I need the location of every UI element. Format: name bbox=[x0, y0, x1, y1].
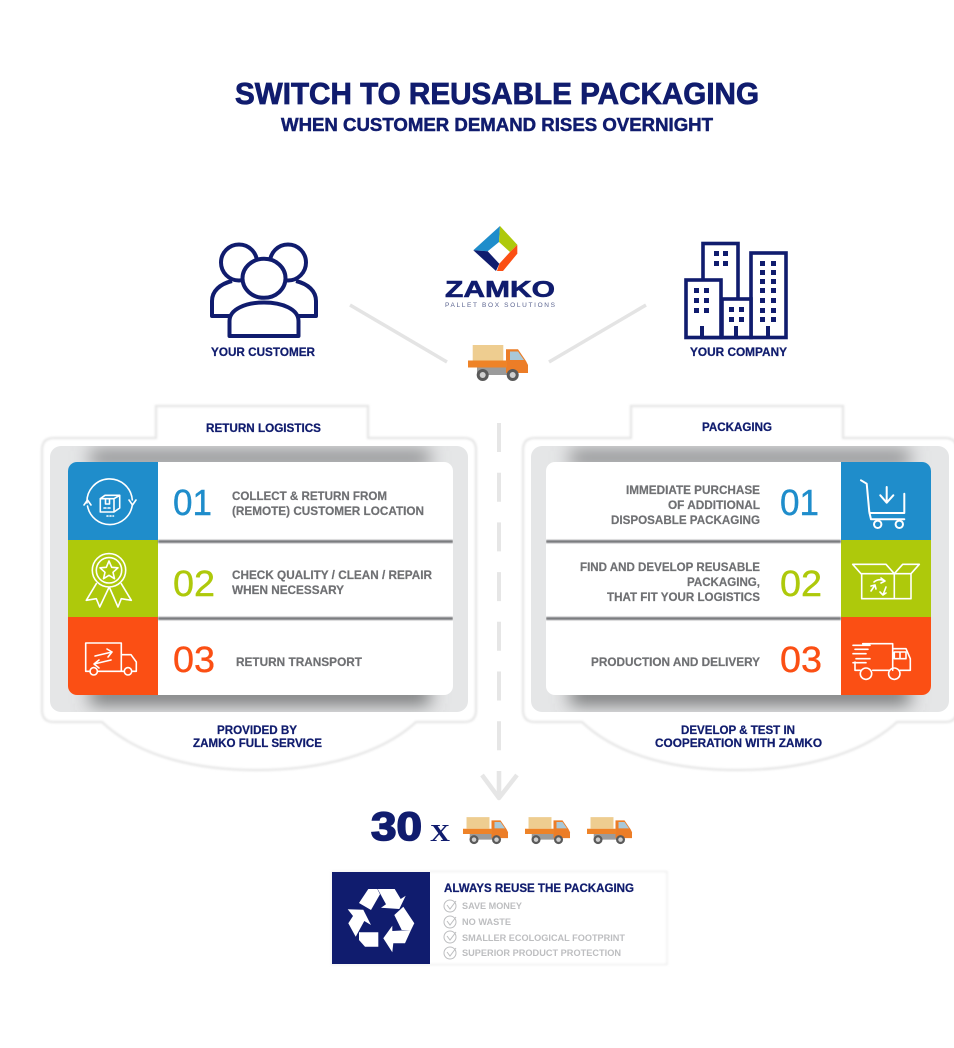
step 02: 02 bbox=[780, 563, 822, 604]
icon: your customer: YOUR CUSTOMER bbox=[211, 345, 315, 359]
step 01 bbox=[173, 482, 424, 523]
icon: your company bbox=[686, 244, 787, 359]
title: WHEN CUSTOMER DEMAND RISES OVERNIGHT bbox=[281, 115, 713, 135]
icon: cart bbox=[861, 480, 904, 528]
step 01: OF ADDITIONAL bbox=[668, 498, 760, 512]
step 03: 03 bbox=[780, 639, 822, 680]
caption: develop and test: COOPERATION WITH ZAMKO bbox=[655, 736, 822, 750]
caption: provided by: ZAMKO FULL SERVICE bbox=[193, 736, 322, 750]
panel: packaging bbox=[523, 406, 954, 770]
caption: develop and test bbox=[655, 723, 822, 750]
step 02: THAT FIT YOUR LOGISTICS bbox=[607, 590, 760, 604]
heading: packaging: PACKAGING bbox=[702, 420, 772, 434]
step 01: 01 bbox=[173, 482, 212, 523]
heading: return logistics: RETURN LOGISTICS bbox=[206, 421, 321, 435]
logo: Zamko: ZAMKO bbox=[445, 276, 555, 302]
benefits list: SUPERIOR PRODUCT PROTECTION bbox=[462, 948, 621, 958]
step 01: (REMOTE) CUSTOMER LOCATION bbox=[232, 504, 424, 518]
logo: Zamko: PALLET BOX SOLUTIONS bbox=[445, 302, 556, 309]
caption: develop and test: DEVELOP & TEST IN bbox=[681, 723, 795, 737]
caption: provided by bbox=[193, 723, 322, 750]
icon: recycle bbox=[348, 889, 414, 952]
multiplier: 30 x trucks: X bbox=[430, 821, 451, 847]
arrow: dashed flow bbox=[482, 423, 517, 798]
icon: recycling box bbox=[853, 564, 919, 599]
icon: fast truck bbox=[853, 644, 910, 679]
icon: award ribbon bbox=[86, 554, 131, 607]
step 03 bbox=[591, 639, 822, 680]
logo: Zamko bbox=[445, 226, 556, 309]
step 01 bbox=[611, 482, 819, 527]
step 03: RETURN TRANSPORT bbox=[236, 655, 363, 669]
panel: always reuse bbox=[332, 872, 667, 964]
benefits list bbox=[444, 900, 625, 959]
icon: box cycle bbox=[84, 479, 136, 525]
title: SWITCH TO REUSABLE PACKAGING bbox=[235, 76, 759, 111]
benefits list: SAVE MONEY bbox=[462, 901, 522, 911]
icon: return truck bbox=[86, 643, 136, 675]
step 02: PACKAGING, bbox=[687, 575, 760, 589]
card: steps bbox=[546, 462, 931, 695]
arrow: customer link bbox=[350, 305, 447, 362]
benefits list: NO WASTE bbox=[462, 917, 511, 927]
multiplier: 30 x trucks bbox=[371, 805, 632, 849]
heading: always reuse: ALWAYS REUSE THE PACKAGING bbox=[444, 881, 634, 895]
step 03: PRODUCTION AND DELIVERY bbox=[591, 655, 760, 669]
multiplier: 30 x trucks: 30 bbox=[371, 805, 422, 849]
step 02 bbox=[580, 560, 822, 604]
icon: your customer bbox=[211, 244, 316, 359]
card: steps bbox=[68, 462, 453, 695]
panel: return logistics bbox=[42, 406, 476, 770]
step 01: 01 bbox=[780, 482, 819, 523]
title bbox=[235, 76, 759, 135]
step 03: 03 bbox=[173, 639, 215, 680]
step 02: FIND AND DEVELOP REUSABLE bbox=[580, 560, 760, 574]
benefits list: SMALLER ECOLOGICAL FOOTPRINT bbox=[462, 933, 625, 943]
step 01: IMMEDIATE PURCHASE bbox=[626, 483, 760, 497]
caption: provided by: PROVIDED BY bbox=[217, 723, 297, 737]
step 02: CHECK QUALITY / CLEAN / REPAIR bbox=[232, 568, 432, 582]
step 02: 02 bbox=[173, 563, 215, 604]
step 01: DISPOSABLE PACKAGING bbox=[611, 513, 760, 527]
arrow: company link bbox=[549, 305, 646, 362]
step 02: WHEN NECESSARY bbox=[232, 583, 344, 597]
step 01: COLLECT & RETURN FROM bbox=[232, 489, 387, 503]
step 03 bbox=[173, 639, 363, 680]
icon: delivery truck bbox=[468, 345, 528, 381]
step 02 bbox=[173, 563, 432, 604]
icon: your company: YOUR COMPANY bbox=[690, 345, 787, 359]
